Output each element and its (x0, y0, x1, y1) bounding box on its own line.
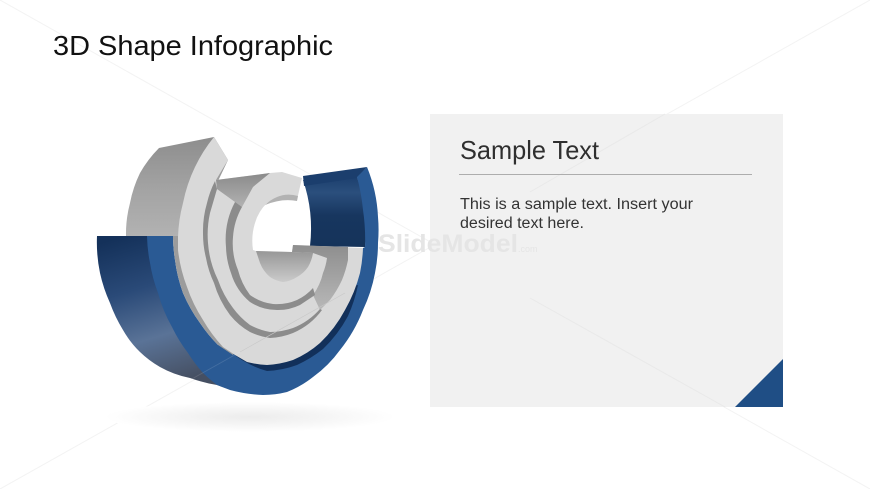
ring groove one (203, 181, 322, 338)
centre rim shadow (265, 195, 298, 205)
body text: desired text here. (460, 215, 584, 232)
title: 3D Shape Infographic (53, 30, 333, 61)
blue front ring (147, 167, 379, 395)
watermark: SlideModel (378, 230, 518, 258)
right grey wall (292, 245, 348, 310)
heading rule (459, 174, 752, 175)
corner triangle (735, 359, 783, 407)
back blue inner wall (303, 177, 366, 247)
ring two top wall (216, 173, 270, 207)
centre grey wall (256, 251, 313, 282)
blue top cap (303, 167, 367, 186)
dark inner edge (232, 285, 358, 371)
outer grey ring side (126, 137, 228, 240)
panel: sample text (430, 114, 783, 407)
blue side wall (97, 236, 240, 392)
3D ring shape (97, 137, 379, 395)
light ring faces (178, 137, 363, 365)
watermark: .com (518, 244, 538, 254)
body text: This is a sample text. Insert your (460, 196, 693, 213)
ring groove two (226, 202, 315, 310)
panel heading: Sample Text (460, 135, 600, 165)
ground shadow (105, 402, 395, 432)
grey sliver beside light ring (173, 236, 240, 355)
